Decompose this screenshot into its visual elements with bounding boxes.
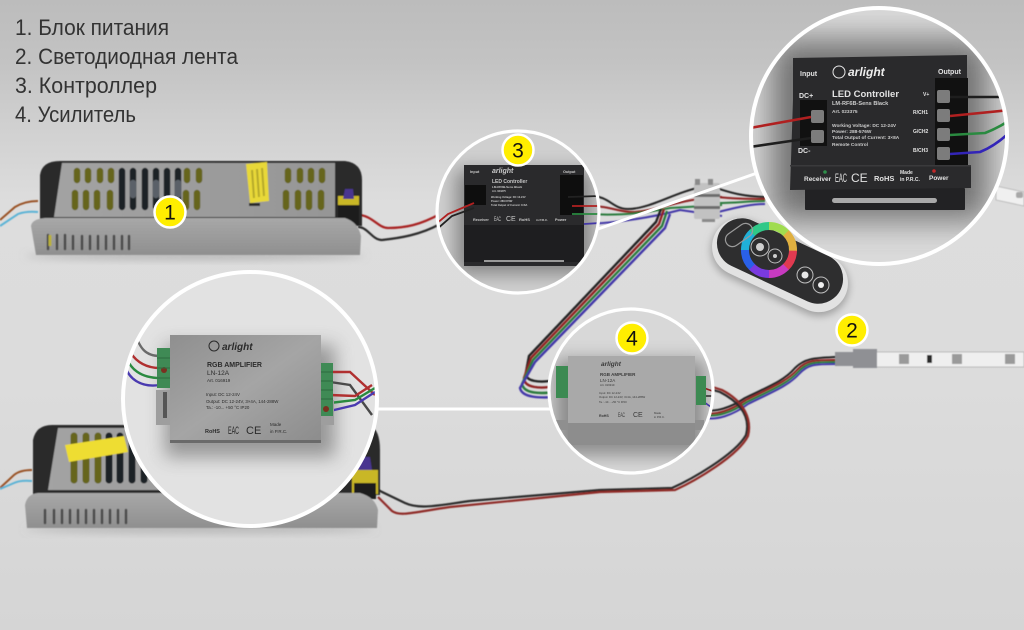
amplifier text: Output: DC 12-24V, 3×4A, 144-288W — [206, 399, 279, 404]
indicator lights — [823, 170, 827, 174]
legend text: 2. Светодиодная лента — [15, 44, 238, 69]
body text: LED Controller — [492, 179, 527, 185]
badge 2 — [836, 314, 868, 346]
wires: mains input of second supply — [0, 470, 32, 489]
green terminals — [556, 366, 706, 405]
led strip top right — [996, 186, 1024, 206]
controller text: RoHS — [874, 174, 894, 183]
amplifier text: Made — [270, 422, 282, 427]
wires — [750, 97, 1010, 154]
power supply 1 front panel — [31, 218, 361, 255]
body text: arlight — [492, 168, 514, 175]
power supply 2 vents — [74, 436, 98, 480]
body text: LM-RF6B-Sens Black — [492, 185, 523, 189]
right terminal — [935, 78, 968, 165]
amplifier text: arlight — [222, 342, 253, 353]
strip — [874, 352, 1024, 367]
body text — [470, 168, 576, 223]
amplifier text: Input: DC 12-24V — [206, 392, 240, 397]
body text: Art. 023375 — [492, 189, 506, 193]
controller text: LED Controller — [832, 89, 899, 100]
power supply 1 — [25, 161, 365, 260]
text: Input: DC 12-24V — [599, 391, 621, 395]
amplifier text: LN-12A — [207, 370, 230, 377]
amplifier text: RoHS — [205, 429, 220, 435]
text: RGB AMPLIFIER — [600, 372, 636, 377]
controller text: EAC — [835, 171, 847, 185]
controller text: Made — [900, 170, 913, 176]
power supply 1 vents — [75, 171, 322, 207]
text: LN-12A — [600, 378, 615, 383]
text: CE — [633, 412, 643, 419]
text: Ta.: -10... +50 °C IP20 — [599, 400, 627, 404]
body text: Input — [470, 170, 480, 174]
legend text — [15, 15, 238, 127]
amplifier text: in P.R.C. — [270, 429, 287, 434]
amplifier text: Ta.: -10... +50 °C IP20 — [206, 405, 250, 410]
controller text: Power: 288-576W — [832, 129, 872, 135]
splitter terminal block — [694, 179, 720, 222]
amplifier text: CE — [246, 425, 261, 437]
badge 3 — [502, 134, 534, 166]
shadow — [772, 40, 988, 220]
text: in P.R.C. — [654, 415, 665, 419]
controller text: Receiver — [804, 176, 832, 183]
controller text: Output — [938, 69, 962, 76]
callout: amplifier large — [123, 272, 378, 526]
wires: power from second supply to amplifier — [378, 385, 749, 514]
strip leds — [899, 354, 1015, 364]
wires: rgb bundle from controller to splitter and amplifier — [520, 187, 765, 397]
body text: Receiver — [473, 218, 489, 222]
lower front strip — [790, 165, 971, 166]
amplifier wires — [128, 341, 375, 416]
controller text: DC- — [798, 148, 811, 155]
bracket — [805, 188, 965, 210]
controller text: Total Output of Current: 3×8A — [832, 135, 900, 141]
controller body — [790, 55, 971, 190]
flanges — [156, 390, 334, 425]
wires — [436, 196, 600, 230]
controller text: Remote Control — [832, 142, 868, 148]
shadow — [165, 345, 335, 457]
controller text: LM-RF6B-Sens Black — [832, 101, 889, 107]
callout: LED controller large — [750, 8, 1010, 264]
terminal right — [321, 363, 333, 416]
text: RoHS — [599, 414, 609, 418]
legend text: 1. Блок питания — [15, 15, 169, 40]
body text: EAC — [494, 217, 501, 223]
text: EAC — [618, 413, 625, 419]
power supply 1 top plate — [54, 163, 335, 217]
badge 1 — [154, 196, 186, 228]
body text: Working Voltage: DC 12-24V — [491, 195, 526, 199]
power supply 1 terminal block — [338, 189, 359, 225]
power supply 1 label — [246, 162, 269, 206]
badge 4 — [616, 322, 648, 354]
controller text: V+ — [923, 92, 929, 98]
power supply 2 body — [33, 425, 380, 495]
amplifier text: EAC — [228, 425, 239, 437]
body — [464, 165, 584, 266]
shadow — [555, 360, 705, 455]
led strip with connector — [835, 349, 1024, 368]
connector lines between callouts — [375, 172, 760, 409]
legend text: 4. Усилитель — [15, 102, 136, 127]
connector — [835, 349, 877, 368]
controller text: Working Voltage: DC 12-24V — [832, 123, 897, 129]
body text: RoHS — [519, 217, 530, 222]
controller text: Power — [929, 175, 949, 182]
legend text: 3. Контроллер — [15, 73, 157, 98]
controller text: B/CH3 — [913, 148, 928, 154]
wires: rgb bundle from amplifier to led strip — [706, 357, 836, 418]
power supply 1 body — [40, 161, 362, 226]
wires — [706, 388, 712, 408]
power supply 2 top plate — [48, 428, 340, 490]
controller text — [798, 65, 962, 185]
power supply 2 front panel — [25, 493, 378, 528]
callout: amplifier small — [549, 309, 715, 473]
badge 4: 4 — [626, 328, 638, 350]
controller text: in P.R.C. — [900, 177, 921, 183]
amplifier text — [205, 341, 287, 437]
body text: Power — [555, 218, 567, 222]
controller text: CE — [851, 171, 868, 185]
top panel — [568, 356, 695, 423]
amplifier text: Art. 016919 — [207, 378, 231, 383]
body text: Output — [563, 170, 576, 174]
controller text: G/CH2 — [913, 129, 928, 135]
controller text: arlight — [848, 65, 886, 79]
side panel — [570, 439, 695, 445]
controller text: Art. 023375 — [832, 109, 858, 115]
callout: controller small — [436, 131, 600, 293]
badge 2: 2 — [846, 320, 858, 342]
body text: Total Output of Current: 3×8A — [491, 203, 527, 207]
flange — [552, 420, 704, 430]
power supply 2 — [25, 425, 380, 533]
remote colour wheel — [735, 216, 803, 284]
badge 3: 3 — [512, 140, 524, 162]
terminals — [465, 175, 583, 215]
controller text: R/CH1 — [913, 110, 928, 116]
controller text: DC+ — [799, 93, 813, 100]
wires: power from first supply to controller — [358, 214, 440, 240]
power supply 2 label — [65, 436, 128, 462]
terminal left — [157, 348, 171, 388]
wires: mains input of first supply — [0, 201, 38, 226]
amplifier text: RGB AMPLIFIER — [207, 362, 262, 369]
left terminal — [800, 100, 827, 146]
text — [599, 361, 665, 419]
body text: Power: 288-576W — [491, 199, 513, 203]
remote control — [701, 208, 859, 326]
text: Made — [654, 411, 661, 415]
amplifier body — [170, 335, 321, 443]
badge 1: 1 — [164, 202, 176, 224]
power supply 2 terminal block — [352, 457, 378, 499]
body text: in P.R.C. — [536, 218, 548, 222]
remote buttons — [723, 221, 755, 249]
body text: CE — [506, 216, 516, 223]
text: Output: DC 12-24V, 3×4A, 144-288W — [599, 395, 646, 399]
controller text: Input — [800, 71, 818, 78]
text: arlight — [601, 361, 622, 368]
text: Art. 016919 — [600, 383, 615, 387]
shadow — [456, 170, 592, 274]
